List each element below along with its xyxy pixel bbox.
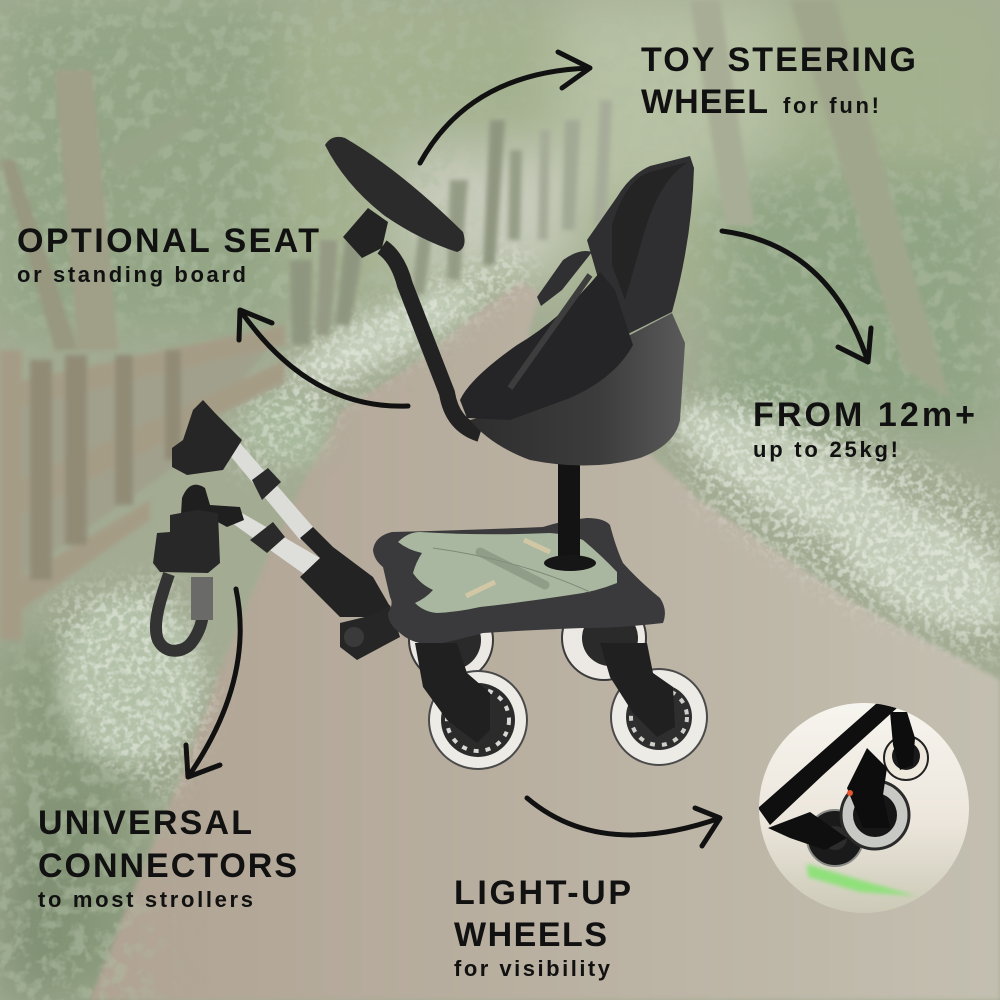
annotation: toy steering wheel <box>420 41 916 163</box>
background: dirt path <box>90 282 1000 1000</box>
hinge <box>340 605 400 660</box>
small wheel <box>884 736 928 780</box>
subtext: for visibility <box>454 956 611 981</box>
seat cushion <box>460 272 633 420</box>
shoulder pad <box>537 251 592 306</box>
buckle strap <box>510 275 590 388</box>
heading line 2: WHEEL <box>641 83 768 121</box>
arrow: from seat <box>239 310 408 406</box>
front left wheel <box>429 671 527 769</box>
steering joint <box>343 208 388 258</box>
rear wheels <box>409 596 646 682</box>
frame beam <box>758 703 897 825</box>
lit wheel <box>841 781 909 849</box>
heading line 1: TOY STEERING <box>641 41 916 79</box>
background: wooden fence <box>0 325 285 640</box>
heading: OPTIONAL SEAT <box>17 222 319 260</box>
arrow: to label <box>420 52 590 163</box>
arrow: to inset <box>527 798 720 846</box>
heading: FROM 12m+ <box>753 396 975 434</box>
front right wheel <box>611 669 707 765</box>
upper clamp <box>172 400 242 475</box>
background: trees <box>0 0 950 400</box>
steering wheel <box>325 137 465 252</box>
arrow: from seat back <box>722 231 871 362</box>
heading line 1: UNIVERSAL <box>38 804 252 842</box>
annotation: universal connectors <box>38 589 297 912</box>
post base <box>544 555 596 571</box>
lower clamp <box>153 510 220 573</box>
heading line 2: WHEELS <box>454 916 607 954</box>
inset: light-up wheel photo <box>755 700 975 920</box>
subtext: for fun! <box>783 93 879 118</box>
top fork <box>890 712 915 770</box>
lower collar <box>250 522 285 553</box>
seat post <box>558 462 580 562</box>
stroller board product <box>153 137 707 769</box>
arrow: from connector <box>186 589 240 777</box>
lower silver tube <box>232 513 320 577</box>
subtext: or standing board <box>17 262 246 287</box>
board deck <box>373 518 665 645</box>
clamp link <box>180 485 244 530</box>
elbow block <box>300 527 392 617</box>
upper collar <box>252 468 281 500</box>
connector arms <box>153 400 400 660</box>
front wheels <box>415 643 707 769</box>
subtext: to most strollers <box>38 887 253 912</box>
heading line 1: LIGHT-UP <box>454 874 631 912</box>
annotation: from 12m+ <box>722 231 975 462</box>
rear wheel <box>807 810 863 866</box>
heading line 2: CONNECTORS <box>38 847 297 885</box>
rear fork <box>768 812 847 850</box>
caster forks <box>415 643 490 743</box>
mid fork <box>847 748 890 828</box>
strap sleeve <box>191 577 213 620</box>
green light <box>807 864 917 896</box>
annotation: optional seat <box>17 222 408 406</box>
upper silver tube <box>228 443 313 540</box>
background: flowers <box>50 245 1000 800</box>
fern print <box>433 540 590 596</box>
subtext: up to 25kg! <box>753 437 898 462</box>
steering column <box>382 247 480 434</box>
strap <box>156 574 204 651</box>
board green mat <box>398 532 617 613</box>
seat back <box>587 156 694 334</box>
annotation: light-up wheels <box>454 798 720 981</box>
back mesh <box>612 162 688 300</box>
led light <box>847 790 853 796</box>
seat shell <box>470 313 685 466</box>
